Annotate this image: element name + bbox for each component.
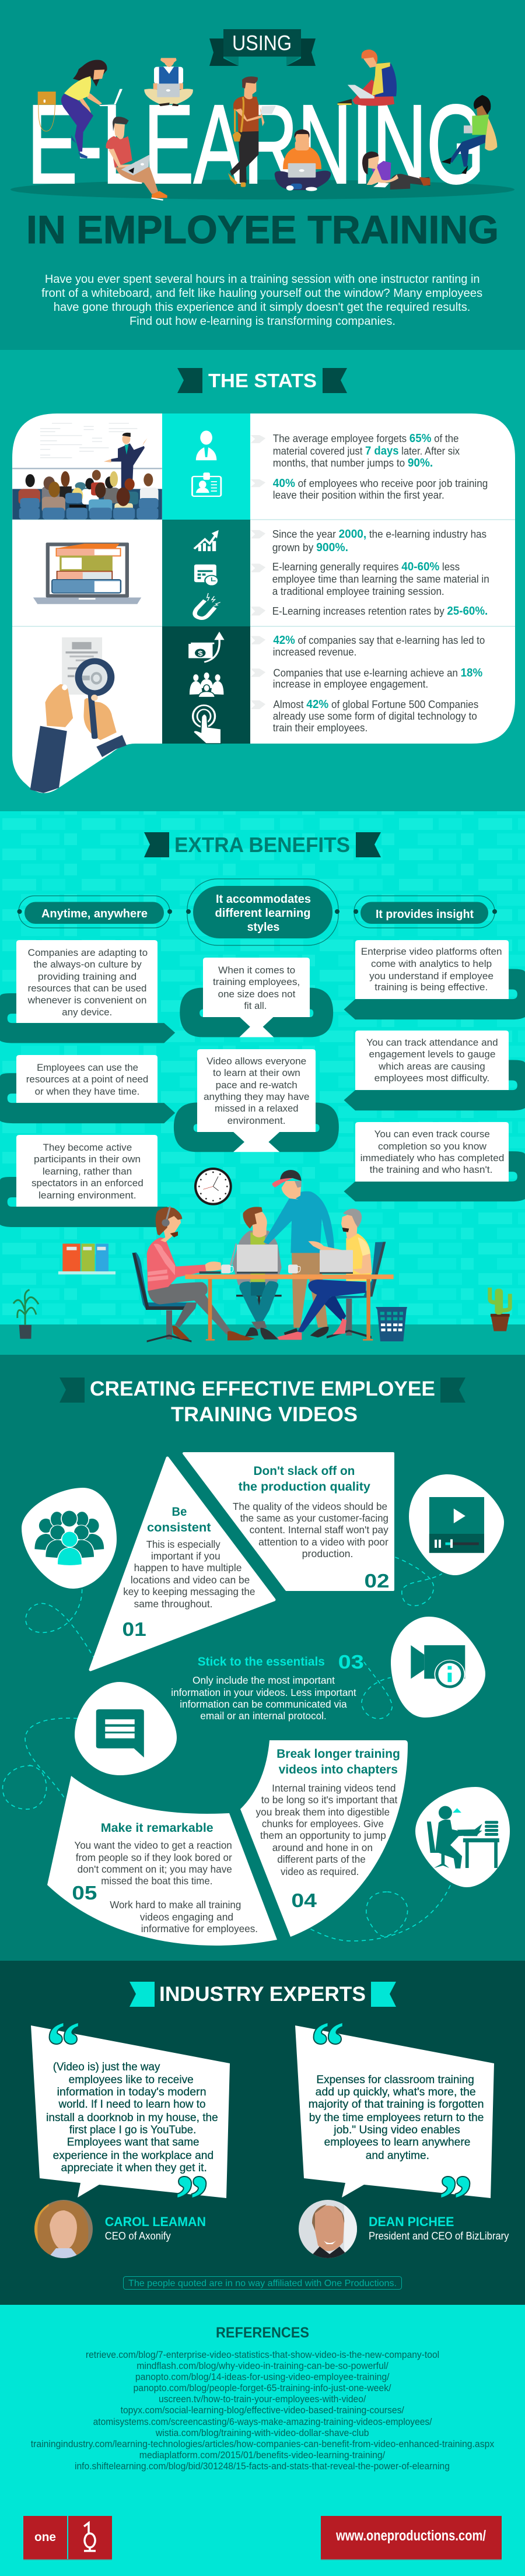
section background: references (0, 2305, 525, 2576)
man with blue vest (144, 58, 193, 106)
cactus (490, 1288, 510, 1331)
quote bubble: dean pichee (295, 2009, 494, 2237)
intro paragraph (41, 273, 482, 328)
reference list: panopto.com/blog/14-ideas-for-using-video-employee-training/ (135, 2371, 390, 2382)
tip 02: production quality: 02 (364, 1570, 390, 1592)
waste bin (376, 1307, 407, 1341)
blob: play video icon (409, 1474, 504, 1575)
quote bubble: carol leaman (31, 2009, 230, 2237)
illustration: classroom (12, 423, 162, 520)
icon: employee (196, 430, 216, 460)
stat text: row 2 (272, 528, 489, 618)
stat text: row 3: train their employees. (273, 722, 368, 734)
quote bubble: dean pichee: Expenses for classroom training (316, 2074, 474, 2086)
portrait: carol leaman (34, 2200, 93, 2258)
tip 03: stick to the essentials: 03 (338, 1651, 364, 1673)
section background: extra benefits (0, 811, 525, 1355)
handbag (38, 92, 56, 131)
stat text: row 2: Since the year 2000, the e-learning industry has (272, 528, 487, 541)
tip 04: break into chapters: Break longer training (276, 1747, 400, 1761)
tip 02: production quality: the same as your customer-facing (240, 1512, 388, 1524)
stat text: row 1: leave their position within the first year. (273, 489, 444, 501)
card: active participants: learning, rather than (43, 1166, 132, 1177)
card: course completion: immediately who has completed (360, 1153, 504, 1163)
stat text: row 2: E-learning generally requires 40-60% less (272, 560, 460, 573)
section background: header (0, 0, 525, 350)
tip 05: make it remarkable: 05 (72, 1882, 97, 1904)
tablet of standing man (261, 106, 276, 114)
heading: the stats: THE STATS (208, 370, 317, 391)
tip 05: make it remarkable: videos engaging and (140, 1911, 233, 1923)
card: active participants: learning environment. (38, 1190, 136, 1201)
tip 05: make it remarkable: Make it remarkable (101, 1821, 214, 1835)
card: video allows everyone: pace and re-watch (216, 1080, 298, 1091)
stat arrows (250, 435, 265, 709)
title: in employee training: IN EMPLOYEE TRAINING (26, 208, 499, 252)
woman lying down (362, 152, 430, 190)
logo: one productions (23, 2516, 112, 2560)
card: companies are adapting: providing training and (38, 972, 136, 982)
card: course completion: You can even track course (374, 1129, 490, 1140)
logo: one productions: one (34, 2531, 56, 2544)
stat text: row 2: E-Learning increases retention rates by 25-60%. (272, 605, 488, 618)
reference list: retrieve.com/blog/7-enterprise-video-statistics-that-show-video-is-the-new-company-tool (86, 2349, 439, 2360)
man with headset (132, 1206, 255, 1343)
pill: different learning styles: styles (247, 921, 279, 934)
card: companies are adapting (16, 940, 158, 1023)
heading: the stats (177, 368, 347, 393)
expert names (105, 2214, 509, 2242)
pill: anytime anywhere: Anytime, anywhere (41, 907, 148, 920)
title people: right group (261, 50, 497, 191)
portrait: dean pichee (299, 2200, 357, 2258)
stat text: row 2: employee time than learning the same material in (272, 573, 489, 585)
stat text: row 1: The average employee forgets 65% of the (273, 432, 459, 445)
quote bubble: dean pichee: ” (439, 2163, 473, 2237)
card: companies are adapting: whenever is convenient on (27, 995, 146, 1005)
card: attendance tracking (355, 1031, 509, 1090)
reference list: panopto.com/blog/people-forget-65-training-info-just-one-week/ (133, 2382, 391, 2393)
intro paragraph: Have you ever spent several hours in a training session with one instructor ranting in (45, 273, 480, 286)
stat text: row 3: already use some form of digital technology to (273, 710, 477, 722)
tip 01: be consistent: important if you (151, 1550, 220, 1562)
card: one size does not fit all (203, 958, 310, 1017)
stat column: row 1 (162, 413, 250, 520)
quote bubble: dean pichee: job." Using video enables (333, 2124, 460, 2136)
link box: website (321, 2516, 502, 2560)
reference list: atomisystems.com/screencasting/6-ways-make-amazing-training-videos-employees/ (93, 2416, 432, 2427)
reference list: trainingindustry.com/learning-technologies/articles/how-companies-can-benefit-from-video-enhanced-training.aspx (31, 2438, 495, 2449)
card: enterprise platforms: come with analytics to help (371, 959, 492, 969)
tip 03: stick to the essentials: information can be communicated via (180, 1698, 347, 1710)
quote bubble: dean pichee: add up quickly, what's more, the (316, 2086, 476, 2098)
stat text: row 1: 40% of employees who receive poor job training (273, 477, 488, 490)
card: video allows everyone: missed in a relaxed (215, 1103, 299, 1114)
card: video allows everyone: Video allows everyone (206, 1056, 306, 1067)
tip 03: stick to the essentials: Only include the most important (192, 1674, 335, 1686)
pill: different learning styles: different learning (215, 907, 310, 920)
tip 01: be consistent: consistent (147, 1521, 211, 1534)
stat text: row 3: increase in employee engagement. (273, 678, 428, 690)
books on shelf (58, 1243, 116, 1274)
illustration: office scene (132, 1168, 407, 1343)
card: one size does not fit all: fit all. (244, 1001, 267, 1011)
ribbons behind the cards (0, 969, 525, 1227)
reference list: mindflash.com/blog/why-video-in-training-can-be-so-powerful/ (136, 2360, 388, 2371)
card: companies are adapting: any device. (62, 1007, 112, 1018)
tip 04: break into chapters: them an opportunity to jump (260, 1830, 386, 1841)
tip 05: make it remarkable: from people so if they look bored or (76, 1852, 232, 1863)
stat column: row 2 (162, 520, 250, 626)
illustrations and icons (12, 423, 265, 793)
banner: using: USING (232, 31, 292, 55)
icon: growth chart (194, 530, 219, 551)
woman with laptop (61, 60, 123, 159)
pill: different learning styles: It accommodates (216, 893, 311, 906)
illustration: laptop with books (33, 542, 141, 604)
tip 01: be consistent: same throughout. (134, 1598, 212, 1610)
card: video allows everyone: to learn at their own (213, 1068, 300, 1078)
card: active participants: spectators in an enforced (32, 1178, 144, 1189)
illustration: magnifier and receipt (30, 637, 127, 793)
tip 02: production quality: The quality of the videos should be (233, 1501, 387, 1512)
reference list: topyx.com/social-learning-blog/effective-video-based-training-courses/ (121, 2405, 404, 2416)
tip 01: be consistent: This is especially (146, 1538, 220, 1550)
quote bubble: carol leaman: Employees want that same (67, 2136, 200, 2149)
tip 01: be consistent: 01 (123, 1618, 146, 1640)
tip 04: break into chapters: chunks for employees. Give (262, 1818, 384, 1830)
icon: engaged team (190, 672, 223, 698)
tip 05: make it remarkable: informative for employees. (141, 1923, 258, 1934)
tip 02: production quality (184, 1453, 393, 1592)
tip 02: production quality: the production quality (239, 1480, 370, 1494)
section background: the stats (0, 350, 525, 811)
quote bubble: dean pichee: by the time employees return to the (309, 2112, 484, 2124)
tip 04: break into chapters: different parts of the (277, 1853, 366, 1865)
quote bubble: carol leaman: (Video is) just the way (53, 2061, 160, 2073)
man with orange shirt (275, 129, 331, 191)
card: enterprise platforms: you understand if employee (369, 971, 494, 982)
tip 01: be consistent: Be (172, 1505, 187, 1519)
man with yellow shirt (277, 1208, 386, 1340)
man with red hair (338, 50, 397, 106)
pill: it provides insight: It provides insight (376, 908, 474, 921)
stat text: row 3: 42% of companies say that e-learning has led to (273, 634, 485, 647)
stat text: row 3: increased revenue. (273, 646, 356, 658)
tip 03: stick to the essentials (171, 1651, 364, 1722)
blob: chat icon (75, 1682, 177, 1775)
expert names: CAROL LEAMAN (105, 2214, 206, 2229)
card: active participants: participants in their own (34, 1154, 141, 1165)
stat text: row 1: months, that number jumps to 90%. (273, 457, 433, 469)
quote bubble: carol leaman: first place I go is YouTube. (69, 2124, 196, 2136)
heading: creating effective employee training videos: TRAINING VIDEOS (171, 1403, 358, 1426)
card: companies are adapting: resources that can be used (28, 983, 146, 994)
tip 01: be consistent (90, 1458, 274, 1670)
expert names: CEO of Axonify (105, 2230, 171, 2242)
icon: magnet (195, 593, 220, 618)
dashed connector lines (2, 1557, 450, 1941)
card: point of need: resources at a point of need (26, 1074, 148, 1085)
link box: website: www.oneproductions.com/ (335, 2528, 486, 2544)
heading: creating effective employee training videos: CREATING EFFECTIVE EMPLOYEE (90, 1378, 435, 1400)
quote bubble: carol leaman: “ (47, 2009, 80, 2083)
tip 04: break into chapters: Internal training videos tend (272, 1782, 396, 1794)
quote bubble: carol leaman: install a doorknob in my house, the (46, 2112, 218, 2124)
stat column: row 3 (162, 626, 250, 744)
pill: different learning styles (186, 879, 340, 945)
card: course completion (355, 1122, 509, 1182)
tip 01: be consistent: locations and video can be (131, 1574, 250, 1586)
tip 05: make it remarkable: You want the video to get a reaction (74, 1839, 232, 1851)
reference list: info.shiftelearning.com/blog/bid/301248/15-facts-and-stats-that-reveal-the-power-of-elearning (75, 2461, 450, 2472)
tip 05: make it remarkable: missed the boat this time. (101, 1875, 212, 1887)
tip 04: break into chapters: to be long so it's important that (261, 1794, 397, 1806)
table (185, 1274, 394, 1341)
stat text: row 3: Almost 42% of global Fortune 500 Companies (273, 698, 478, 711)
tip 05: make it remarkable: Work hard to make all training (110, 1899, 241, 1911)
intro paragraph: Find out how e-learning is transforming companies. (130, 315, 396, 328)
potted plant (13, 1289, 38, 1339)
quote bubble: dean pichee: and anytime. (366, 2150, 429, 2162)
decorations (13, 1243, 510, 1339)
section background: creating videos (0, 1355, 525, 1961)
man at center (221, 1207, 282, 1340)
card: point of need: Employees can use the (37, 1063, 138, 1073)
tip 02: production quality: attention to a video with poor (258, 1536, 388, 1548)
card: video allows everyone (197, 1049, 316, 1132)
tip 01: be consistent: key to keeping messaging the (123, 1586, 255, 1597)
icon: revenue (188, 632, 225, 662)
card: attendance tracking: employees most difficulty. (374, 1073, 489, 1084)
quote bubble: carol leaman: appreciate it when they get it. (61, 2162, 207, 2174)
stat text: row 3: Companies that use e-learning achieve an 18% (273, 667, 482, 679)
title people: left group (38, 58, 264, 201)
card: point of need: or when they have time. (35, 1087, 139, 1097)
quote bubble: carol leaman: ” (175, 2163, 209, 2237)
quote bubble: dean pichee: “ (311, 2009, 344, 2083)
man with red shirt and laptop (106, 117, 167, 201)
card: video allows everyone: anything they may have (204, 1092, 309, 1102)
quote bubble: carol leaman: information in today's modern (57, 2086, 206, 2098)
intro paragraph: front of a whiteboard, and felt like hauling yourself out the window? Many employees (41, 287, 482, 300)
card: attendance tracking: engagement levels to gauge (369, 1049, 496, 1060)
tip 04: break into chapters: video as required. (281, 1866, 359, 1877)
card: one size does not fit all: training employees, (213, 977, 300, 987)
tip 04: break into chapters: you break them into digestible (256, 1806, 390, 1818)
man standing with cap (264, 1170, 334, 1337)
banner: using (209, 29, 316, 66)
reference list: mediaplatform.com/2015/01/benefits-video-learning-training/ (139, 2449, 385, 2461)
card: companies are adapting: the always-on culture by (33, 959, 142, 970)
intro paragraph: have gone through this experience and it simply doesn't get the required results. (54, 301, 470, 314)
floor (0, 1324, 525, 1355)
card: attendance tracking: which areas are causing (378, 1061, 485, 1072)
section background: industry experts (0, 1961, 525, 2305)
expert names: DEAN PICHEE (369, 2214, 454, 2229)
tip 04: break into chapters (240, 1740, 408, 1937)
icon: clock (194, 1168, 232, 1205)
expert names: President and CEO of BizLibrary (369, 2230, 509, 2242)
card: enterprise platforms: training is being effective. (374, 982, 488, 993)
pill: it provides insight (354, 896, 497, 928)
tip 02: production quality: Don't slack off on (253, 1464, 355, 1478)
card: course completion: completion so you know (378, 1141, 487, 1152)
woman in green top (442, 95, 497, 174)
card: enterprise platforms: Enterprise video platforms often (361, 947, 502, 957)
stat text: row 1: material covered just 7 days later. After six (273, 444, 460, 457)
card: active participants (16, 1135, 158, 1207)
tip 01: be consistent: happen to have multiple (134, 1562, 242, 1573)
icon: calendar clock (194, 565, 218, 586)
stat text: row 3 (273, 634, 485, 734)
panel: stats card (12, 413, 515, 793)
card: one size does not fit all: one size does not (218, 989, 296, 1000)
pill: anytime anywhere (18, 896, 172, 928)
icon: id card (192, 472, 221, 496)
reference list: wistia.com/blog/training-with-video-dollar-shave-club (155, 2427, 369, 2438)
stat text: row 1 (273, 432, 488, 501)
ground ellipse (10, 180, 514, 199)
stat text: row 2: grown by 900%. (272, 541, 348, 554)
tip 04: break into chapters: around and hone in on (272, 1842, 373, 1853)
quote bubble: dean pichee: employees to learn anywhere (324, 2136, 470, 2149)
quote bubble: carol leaman: world. If I need to learn how to (58, 2098, 205, 2111)
tip 03: stick to the essentials: Stick to the essentials (198, 1655, 325, 1669)
heading: industry experts (130, 1982, 396, 2007)
tip 04: break into chapters: 04 (291, 1890, 317, 1911)
reference list: uscreen.tv/how-to-train-your-employees-with-video/ (159, 2393, 366, 2405)
quote bubble: dean pichee: majority of that training is forgotten (309, 2098, 484, 2111)
card: active participants: They become active (43, 1142, 132, 1153)
tip 02: production quality: production. (302, 1548, 354, 1559)
tip 05: make it remarkable: don't comment on it; you may have (78, 1863, 232, 1875)
heading: creating effective employee training videos (60, 1378, 466, 1426)
tip 03: stick to the essentials: email or an internal protocol. (200, 1710, 327, 1722)
tip 02: production quality: content. Internal staff won't pay (250, 1524, 388, 1536)
card: companies are adapting: Companies are adapting to (28, 948, 148, 958)
card: video allows everyone: environment. (228, 1116, 286, 1126)
tip 04: break into chapters: videos into chapters (279, 1763, 398, 1776)
card: attendance tracking: You can track attendance and (366, 1038, 498, 1048)
icon: revenue: $ (198, 650, 203, 657)
quote bubble: carol leaman: experience in the workplace and (53, 2150, 214, 2162)
tip 05: make it remarkable (47, 1776, 277, 1946)
disclaimer: The people quoted are in no way affiliated with One Productions. (128, 2279, 397, 2288)
man standing with tablet (228, 76, 264, 187)
quote bubble: carol leaman: employees like to receive (69, 2074, 194, 2086)
card: point of need (16, 1055, 158, 1103)
blob: video info icon (391, 1617, 485, 1718)
heading: references: REFERENCES (216, 2325, 309, 2341)
heading: extra benefits: EXTRA BENEFITS (174, 833, 350, 857)
blob: team icon (22, 1488, 117, 1589)
card: one size does not fit all: When it comes to (218, 965, 295, 976)
card: enterprise platforms (355, 940, 509, 999)
heading: industry experts: INDUSTRY EXPERTS (159, 1983, 366, 2006)
reference list (31, 2349, 495, 2472)
stat text: row 2: a traditional employee training session. (272, 586, 444, 597)
blob: person at desk icon (415, 1787, 510, 1887)
tip 03: stick to the essentials: information in your videos. Less important (171, 1687, 356, 1698)
card: course completion: the training and who hasn't. (370, 1165, 492, 1175)
icon: touch (193, 705, 221, 744)
